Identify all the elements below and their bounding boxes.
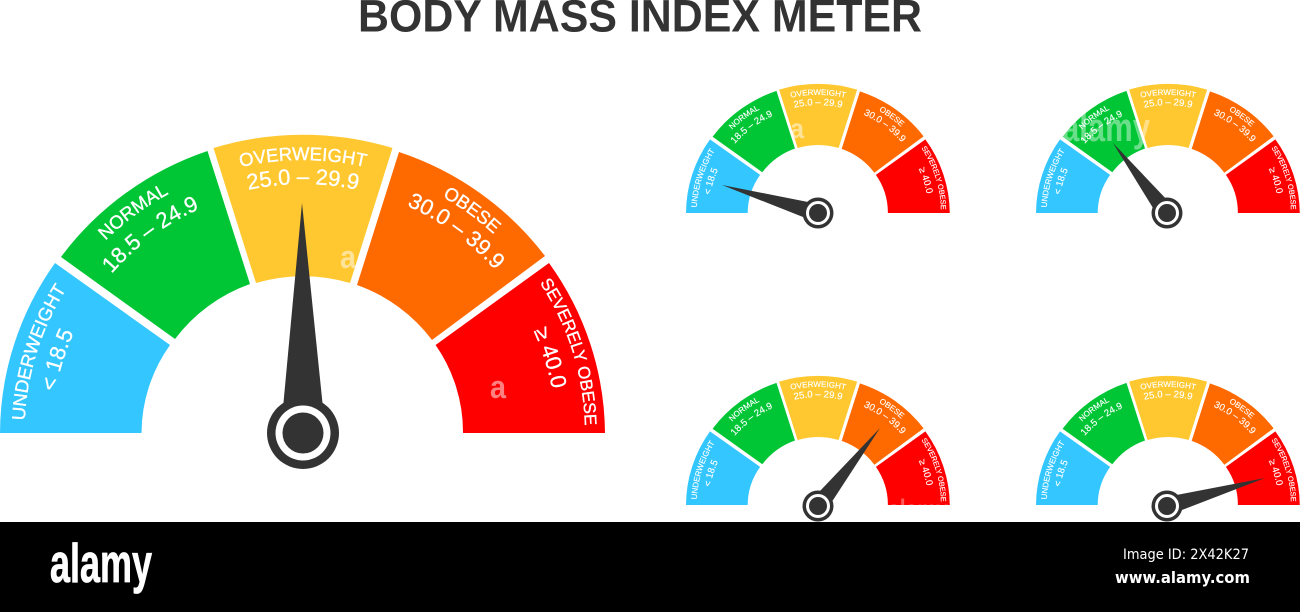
website: www.alamy.com xyxy=(1115,568,1250,587)
small gauge: severely obese reading: NORMAL xyxy=(1077,395,1111,423)
watermark word: alamy xyxy=(1062,106,1151,150)
needle xyxy=(267,203,339,469)
small gauge: severely obese reading: 18.5 – 24.9 xyxy=(1079,401,1124,438)
small gauge: severely obese reading: ≥ 40.0 xyxy=(1266,458,1285,487)
footer band xyxy=(0,522,1300,612)
needle xyxy=(1113,143,1182,228)
large gauge xyxy=(0,134,605,469)
needle xyxy=(722,185,834,228)
alamy logo: alamy xyxy=(50,532,152,594)
watermark letters: a xyxy=(340,239,356,275)
small gauge: obese reading: 30.0 – 39.9 xyxy=(864,401,906,434)
segment: underweight: < 18.5 xyxy=(45,328,72,390)
segment: severely obese xyxy=(436,263,605,433)
small gauge: normal reading: UNDERWEIGHT xyxy=(1041,148,1064,207)
segment: obese: 30.0 – 39.9 xyxy=(408,194,504,268)
segment: overweight: 25.0 – 29.9 xyxy=(247,169,359,190)
small gauge: obese reading: SEVERELY OBESE xyxy=(922,438,946,502)
small gauge: underweight reading: 18.5 – 24.9 xyxy=(731,110,772,144)
small gauge: underweight reading: OVERWEIGHT xyxy=(790,89,846,98)
small gauge: underweight reading: 30.0 – 39.9 xyxy=(864,109,906,142)
small gauge: normal reading: 18.5 – 24.9 xyxy=(1081,110,1122,144)
segment: severely obese: SEVERELY OBESE xyxy=(541,278,597,425)
small gauge: normal reading xyxy=(1036,84,1300,228)
small gauge: severely obese reading: OVERWEIGHT xyxy=(1139,380,1197,392)
small gauge: severely obese reading: UNDERWEIGHT xyxy=(1040,439,1067,500)
segment: overweight xyxy=(214,134,392,283)
small gauge: severely obese reading: OBESE xyxy=(1228,397,1256,420)
needle xyxy=(1152,478,1265,522)
watermark letters: a xyxy=(490,369,506,405)
small gauge: obese reading: ≥ 40.0 xyxy=(918,458,933,486)
small gauge: severely obese reading: 30.0 – 39.9 xyxy=(1212,399,1258,437)
small gauge: normal reading: ≥ 40.0 xyxy=(1268,166,1283,194)
small gauge: obese reading: UNDERWEIGHT xyxy=(691,440,714,499)
small gauge: underweight reading: OBESE xyxy=(880,106,905,127)
small gauge: normal reading: < 18.5 xyxy=(1056,168,1068,194)
segment: obese xyxy=(357,152,545,340)
small gauge: obese reading: 18.5 – 24.9 xyxy=(731,402,772,436)
small gauge: underweight reading: < 18.5 xyxy=(706,168,718,194)
small gauge: obese reading: < 18.5 xyxy=(706,460,718,486)
small gauge: underweight reading xyxy=(686,84,950,228)
image id: Image ID: 2X42K27 xyxy=(1123,547,1249,563)
small gauge: severely obese reading xyxy=(1036,376,1300,522)
segment: overweight: OVERWEIGHT xyxy=(240,147,368,166)
small gauge: normal reading: OBESE xyxy=(1230,106,1255,127)
watermark word: alamy xyxy=(888,494,948,527)
segment: normal: NORMAL xyxy=(98,186,169,240)
small gauge: obese reading: OBESE xyxy=(880,398,905,419)
small gauge: normal reading: 25.0 – 29.9 xyxy=(1144,98,1192,108)
small gauge: normal reading: NORMAL xyxy=(1078,106,1110,130)
watermark letter: a xyxy=(790,113,804,144)
small gauge: normal reading: SEVERELY OBESE xyxy=(1272,146,1296,210)
segment: severely obese: ≥ 40.0 xyxy=(534,326,566,388)
small gauge: obese reading: OVERWEIGHT xyxy=(790,381,846,390)
needle xyxy=(802,428,880,522)
small gauge: underweight reading: UNDERWEIGHT xyxy=(691,148,714,207)
segment: normal xyxy=(61,151,250,339)
small gauge: obese reading xyxy=(686,376,950,527)
small gauge: obese reading: NORMAL xyxy=(728,398,760,422)
small gauge: normal reading: OVERWEIGHT xyxy=(1140,89,1196,98)
small gauge: underweight reading: NORMAL xyxy=(728,106,760,130)
small gauge: underweight reading: SEVERELY OBESE xyxy=(922,146,946,210)
small gauge: underweight reading: 25.0 – 29.9 xyxy=(794,98,842,108)
small gauge: underweight reading: ≥ 40.0 xyxy=(918,166,933,194)
segment: obese: OBESE xyxy=(445,188,502,234)
small gauge: obese reading: 25.0 – 29.9 xyxy=(794,390,842,400)
small gauge: severely obese reading: SEVERELY OBESE xyxy=(1270,436,1298,502)
segment: normal: 18.5 – 24.9 xyxy=(103,196,197,273)
segment: underweight: UNDERWEIGHT xyxy=(12,282,64,419)
small gauge: severely obese reading: < 18.5 xyxy=(1052,458,1071,488)
segment: underweight xyxy=(0,263,170,433)
small gauge: severely obese reading: 25.0 – 29.9 xyxy=(1143,389,1193,403)
small gauge: normal reading: 30.0 – 39.9 xyxy=(1214,109,1256,142)
watermark letters xyxy=(340,239,506,405)
